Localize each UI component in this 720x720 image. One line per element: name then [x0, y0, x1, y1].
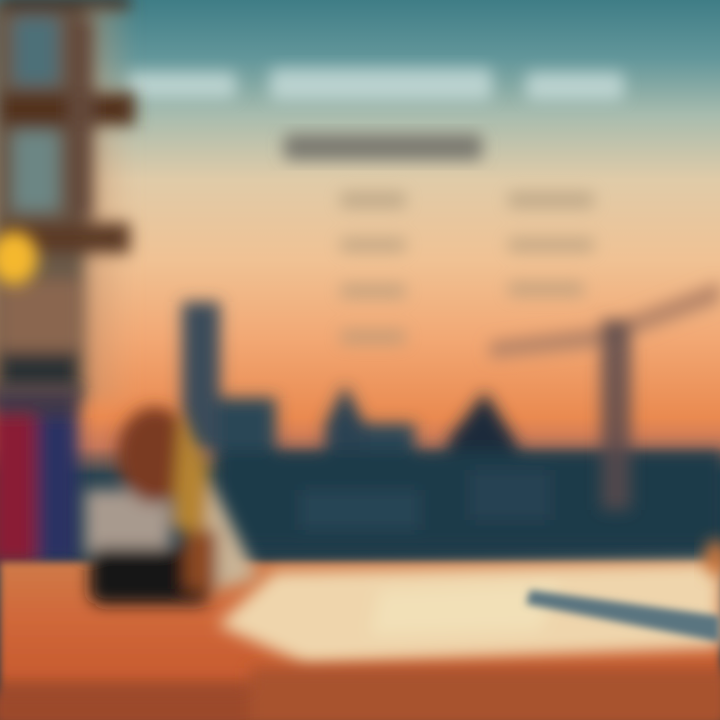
left tower: [0, 0, 135, 400]
bridge: [490, 282, 720, 510]
table: [0, 562, 720, 720]
figure: [85, 407, 258, 604]
text columns: [340, 192, 594, 344]
skyline: [182, 302, 720, 550]
pen on paper: [526, 590, 720, 642]
subtitle band: [284, 134, 482, 160]
stacked books: [0, 388, 80, 563]
lamp: [0, 231, 38, 285]
paper sheet: [218, 562, 720, 664]
title band: [128, 68, 624, 100]
table front edge: [0, 668, 720, 720]
hand corner: [704, 540, 720, 576]
